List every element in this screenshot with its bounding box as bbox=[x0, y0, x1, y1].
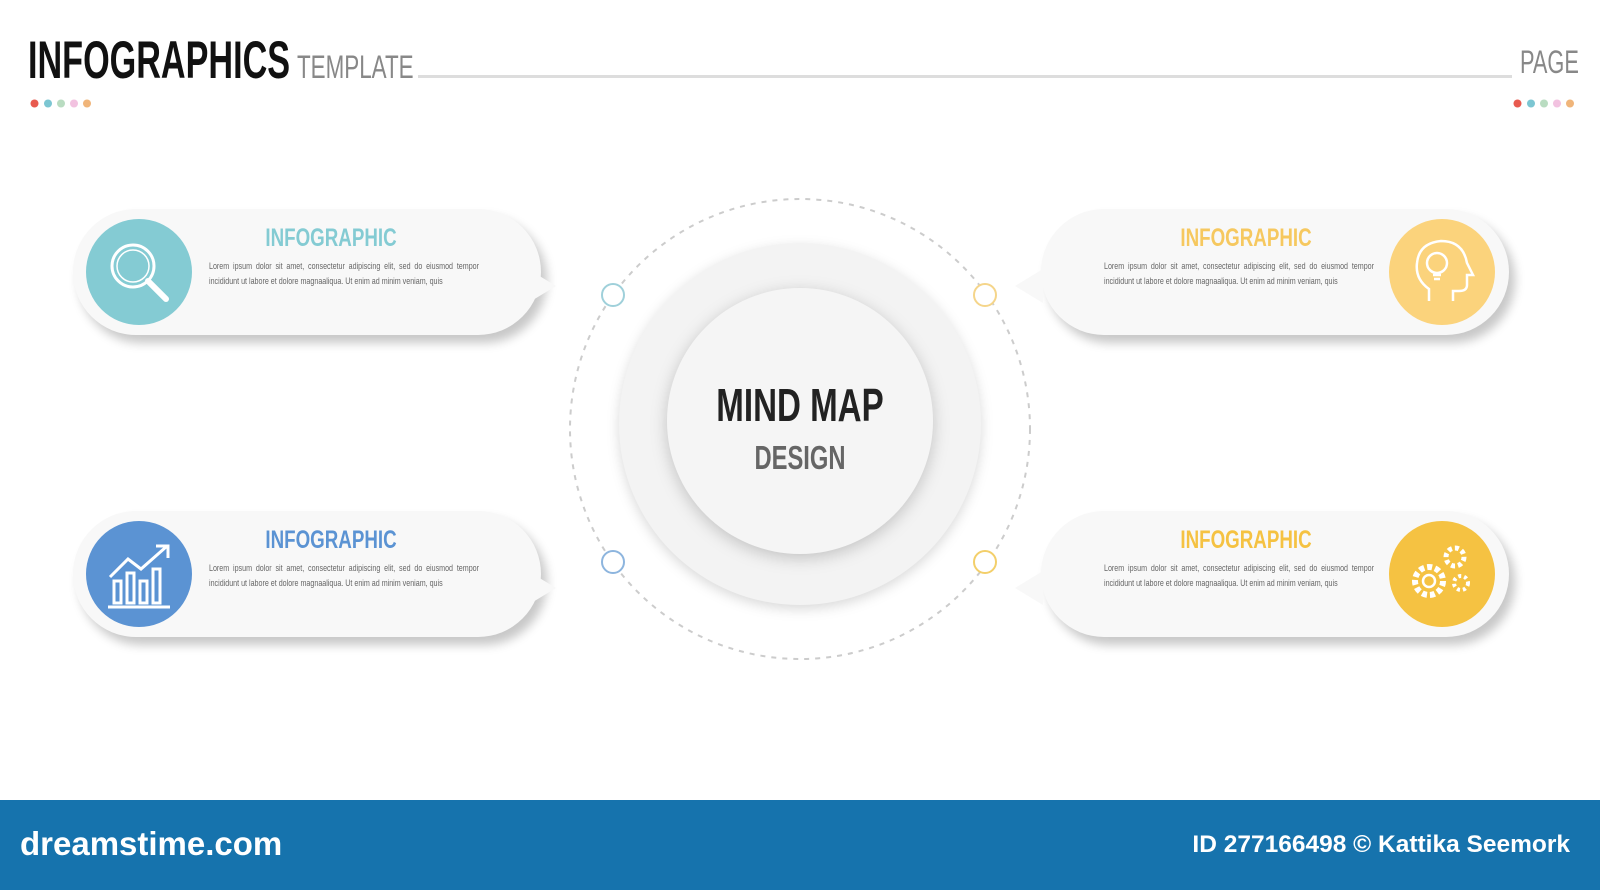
card: top right: Lorem ipsum dolor sit amet, consectetur adipiscing elit, sed do eiusmod tempor incididunt ut labore et dolore magnaaliqua. Ut enim ad minim veniam, quis bbox=[1104, 261, 1374, 287]
footer band bbox=[0, 800, 1600, 890]
icon: chart bbox=[86, 521, 192, 627]
card: bottom right bbox=[1041, 511, 1509, 637]
icon: magnifier bbox=[86, 219, 192, 325]
footer band: dreamstime.com bbox=[20, 825, 282, 862]
center mind map: MIND MAP bbox=[716, 381, 884, 431]
icon: head with bulb bbox=[1389, 219, 1495, 325]
card: top right bbox=[1041, 209, 1509, 335]
page label: PAGE bbox=[1520, 44, 1579, 80]
center mind map: DESIGN bbox=[754, 440, 846, 477]
dots right bbox=[1514, 100, 1574, 108]
icon: gears bbox=[1389, 521, 1495, 627]
card: bottom right: Lorem ipsum dolor sit amet, consectetur adipiscing elit, sed do eiusmod tempor incididunt ut labore et dolore magnaaliqua. Ut enim ad minim veniam, quis bbox=[1104, 563, 1374, 589]
card: top left: INFOGRAPHIC bbox=[265, 224, 397, 252]
card: bottom left bbox=[73, 511, 541, 637]
dots left bbox=[30, 100, 91, 108]
title bbox=[28, 31, 414, 90]
card: top left: Lorem ipsum dolor sit amet, consectetur adipiscing elit, sed do eiusmod tempor incididunt ut labore et dolore magnaaliqua. Ut enim ad minim veniam, quis bbox=[209, 261, 479, 287]
title: INFOGRAPHICS bbox=[28, 31, 290, 90]
footer band: ID 277166498 © Kattika Seemork bbox=[1192, 831, 1570, 858]
card: bottom left: Lorem ipsum dolor sit amet, consectetur adipiscing elit, sed do eiusmod tempor incididunt ut labore et dolore magnaaliqua. Ut enim ad minim veniam, quis bbox=[209, 563, 479, 589]
center mind map bbox=[569, 198, 1031, 660]
card: bottom left: INFOGRAPHIC bbox=[265, 526, 397, 554]
title: TEMPLATE bbox=[297, 49, 414, 85]
card: bottom right: INFOGRAPHIC bbox=[1180, 526, 1312, 554]
card: top right: INFOGRAPHIC bbox=[1180, 224, 1312, 252]
card: top left bbox=[73, 209, 541, 335]
